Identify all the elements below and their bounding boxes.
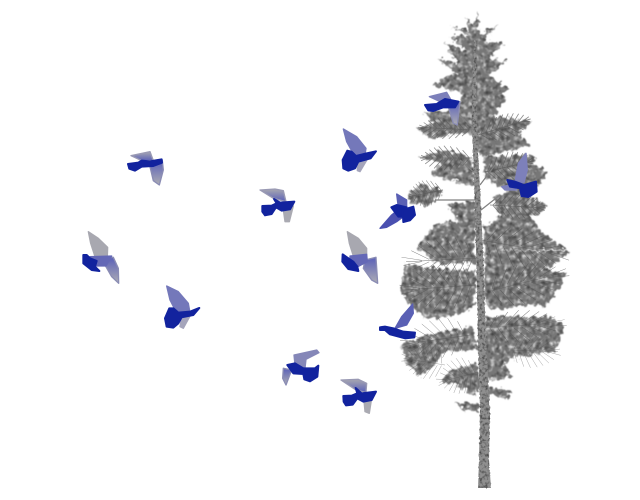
- foliage needles: lower drooping sprays: [398, 222, 573, 399]
- bird 1 upper left: [128, 152, 163, 185]
- bird 12 on right of tree: [502, 153, 537, 197]
- bird 5 centre left: [260, 189, 294, 222]
- bird 8 lower centre: [283, 350, 319, 385]
- foliage needles: upper sprays: [406, 107, 547, 220]
- branches: [435, 112, 500, 210]
- bird 3 lower left, dark tail: [165, 286, 199, 328]
- bird 7 near tree branch: [380, 194, 415, 228]
- bird 11 in upper tree: [425, 92, 460, 125]
- pine tree: [398, 13, 573, 488]
- bird 6 centre, mostly grey: [342, 232, 378, 283]
- foliage mass: [400, 13, 570, 412]
- trunk: [472, 40, 491, 488]
- bird 4 centre top: [343, 129, 376, 172]
- bird 10 at lower tree: [380, 304, 415, 338]
- bird 9 bottom centre: [341, 379, 376, 413]
- bird 2 left, mostly grey: [83, 232, 119, 283]
